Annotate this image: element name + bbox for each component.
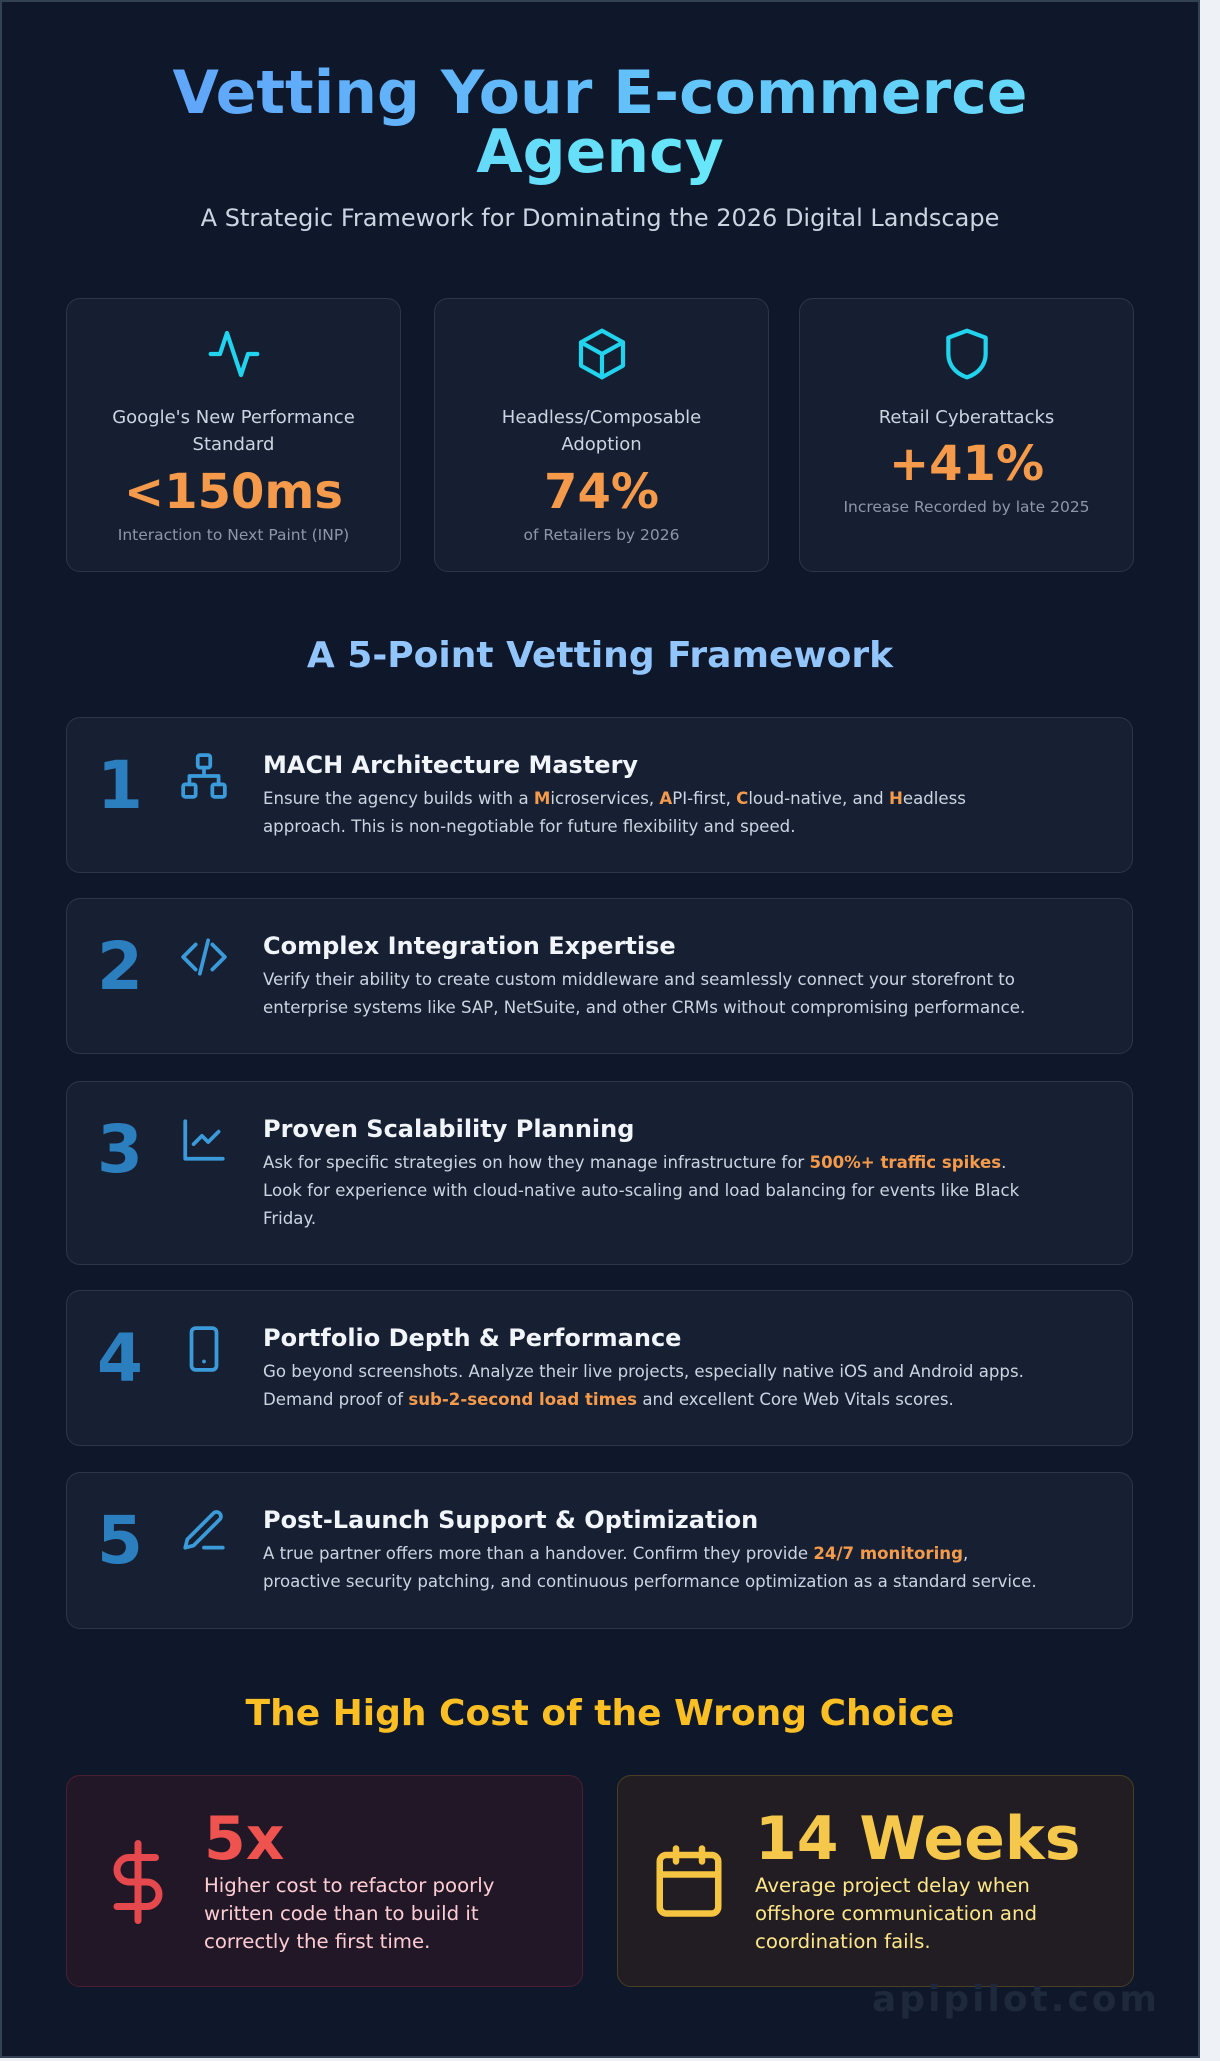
big number: 14 Weeks <box>755 1804 1080 1874</box>
big number: 5x <box>204 1804 284 1874</box>
heading: Complex Integration Expertise <box>263 932 676 960</box>
icon: chart <box>183 1119 225 1161</box>
heading: MACH Architecture Mastery <box>263 751 638 779</box>
number 4: 4 <box>97 1320 143 1397</box>
stat label: Retail Cyberattacks <box>879 407 1054 428</box>
description: enterprise systems like SAP, NetSuite, and other CRMs without compromising performance. <box>263 998 1025 1017</box>
title: Vetting Your E-commerce <box>173 58 1027 128</box>
stat number: <150ms <box>124 464 343 520</box>
description <box>263 1544 1037 1591</box>
cost card: 14 weeks <box>617 1775 1134 1987</box>
stat label: Standard <box>193 434 274 455</box>
description: correctly the first time. <box>204 1930 430 1953</box>
icon: box <box>578 328 626 380</box>
description: Friday. <box>263 1209 316 1228</box>
section heading: framework: A 5-Point Vetting Framework <box>307 635 893 676</box>
number 3: 3 <box>97 1111 143 1188</box>
number 1: 1 <box>97 747 143 824</box>
description <box>263 1153 1020 1228</box>
stat number: 74% <box>544 464 659 520</box>
stat number: +41% <box>889 436 1044 492</box>
title <box>173 58 1027 187</box>
stat sublabel: of Retailers by 2026 <box>524 526 679 544</box>
description: Go beyond screenshots. Analyze their live projects, especially native iOS and Android apps. <box>263 1362 1024 1381</box>
stat label: Adoption <box>561 434 642 455</box>
description: written code than to build it <box>204 1902 479 1925</box>
description: approach. This is non-negotiable for future flexibility and speed. <box>263 817 796 836</box>
subtitle: A Strategic Framework for Dominating the 2026 Digital Landscape <box>201 204 999 232</box>
heading: Proven Scalability Planning <box>263 1115 634 1143</box>
icon: shield <box>946 328 988 380</box>
stat label <box>112 407 355 455</box>
stat card: cyberattacks <box>799 298 1134 572</box>
card 2: integration <box>66 898 1133 1054</box>
watermark: apipilot.com <box>872 1979 1160 2020</box>
icon: pen <box>183 1510 225 1550</box>
description: Verify their ability to create custom middleware and seamlessly connect your storefront to <box>263 970 1015 989</box>
card 4: portfolio <box>66 1290 1133 1446</box>
heading: Post-Launch Support & Optimization <box>263 1506 758 1534</box>
icon: calendar <box>656 1845 722 1917</box>
stat sublabel: Interaction to Next Paint (INP) <box>118 526 349 544</box>
description <box>263 789 966 836</box>
stat label: Google's New Performance <box>112 407 355 428</box>
description <box>263 970 1025 1017</box>
icon: phone <box>190 1326 218 1372</box>
icon: network <box>181 753 227 799</box>
description: proactive security patching, and continuous performance optimization as a standard service. <box>263 1572 1037 1591</box>
cost card: 5x <box>66 1775 583 1987</box>
description: Ask for specific strategies on how they manage infrastructure for 500%+ traffic spikes. <box>263 1153 1006 1172</box>
number 2: 2 <box>97 928 143 1005</box>
description: offshore communication and <box>755 1902 1037 1925</box>
description: coordination fails. <box>755 1930 931 1953</box>
stat card: INP <box>66 298 401 572</box>
stat sublabel: Increase Recorded by late 2025 <box>843 498 1090 516</box>
description: A true partner offers more than a handover. Confirm they provide 24/7 monitoring, <box>263 1544 968 1563</box>
stat card: headless <box>434 298 769 572</box>
description: Average project delay when <box>755 1874 1030 1897</box>
title: Agency <box>476 117 724 187</box>
card 3: scalability <box>66 1081 1133 1265</box>
description <box>204 1874 494 1953</box>
card 5: support <box>66 1472 1133 1629</box>
description: Look for experience with cloud-native auto-scaling and load balancing for events like Black <box>263 1181 1019 1200</box>
icon: dollar <box>114 1840 162 1924</box>
card 1: MACH <box>66 717 1133 873</box>
number 5: 5 <box>97 1502 143 1579</box>
stat label: Headless/Composable <box>502 407 701 428</box>
section heading: cost: The High Cost of the Wrong Choice <box>246 1693 954 1734</box>
description: Ensure the agency builds with a Microservices, API-first, Cloud-native, and Headless <box>263 789 966 808</box>
description: Demand proof of sub-2-second load times and excellent Core Web Vitals scores. <box>263 1390 954 1409</box>
description: Higher cost to refactor poorly <box>204 1874 494 1897</box>
icon: activity <box>208 330 260 378</box>
heading: Portfolio Depth & Performance <box>263 1324 681 1352</box>
description <box>263 1362 1024 1409</box>
stat label <box>502 407 701 455</box>
description <box>755 1874 1037 1953</box>
icon: code <box>181 938 227 976</box>
